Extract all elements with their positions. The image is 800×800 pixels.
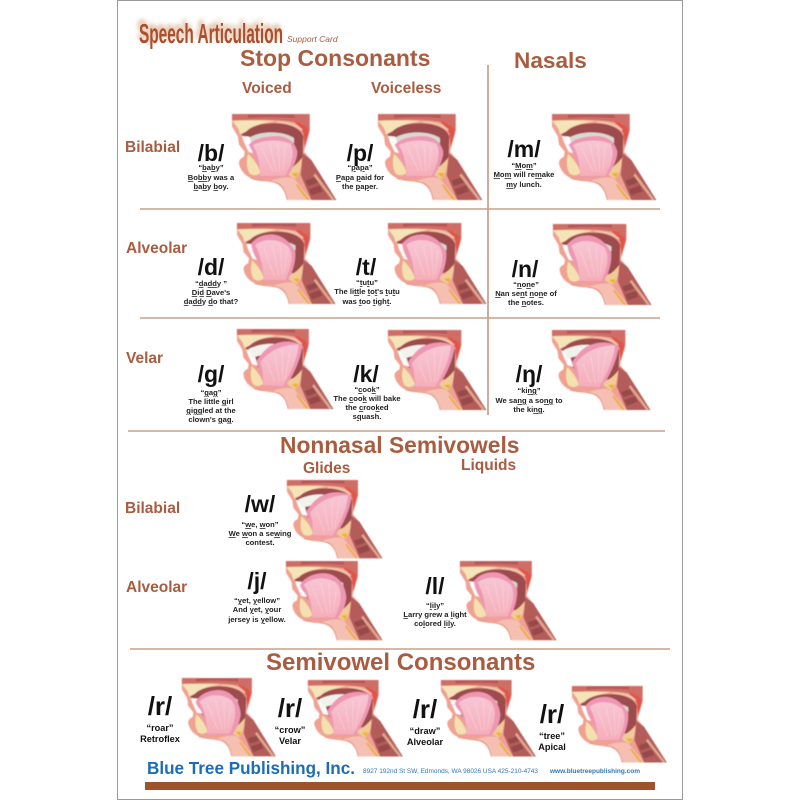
row label: alveolar glide: Alveolar — [126, 579, 187, 596]
example t: “tutu” — [356, 278, 378, 287]
icon: mouth cross-section r apical — [572, 686, 667, 763]
sound card: /l/ — [403, 561, 556, 640]
sound card: /r/ apical — [538, 686, 667, 763]
heading: glides: Glides — [303, 460, 350, 477]
sound card: /r/ alveolar — [407, 680, 536, 757]
row label: velar: Velar — [126, 350, 163, 367]
footer bar — [145, 782, 655, 790]
example b: “baby” — [198, 163, 224, 172]
phoneme l: /l/ — [425, 573, 445, 599]
icon: mouth cross-section ng — [552, 330, 650, 410]
icon: mouth cross-section b — [232, 114, 336, 200]
label velar: Velar — [279, 736, 301, 746]
sound card: /n/ — [495, 224, 651, 307]
example p: Papa paid for — [336, 173, 384, 182]
example l: colored lily. — [414, 619, 456, 628]
heading: nasals: Nasals — [514, 48, 587, 73]
icon: mouth cross-section m — [552, 114, 656, 200]
row label: bilabial: Bilabial — [125, 139, 180, 156]
phoneme r apical: /r/ — [540, 699, 564, 729]
example p: “papa” — [347, 163, 373, 172]
example k: “cook” — [354, 385, 380, 394]
icon: mouth cross-section l — [460, 561, 556, 640]
example k: The cook will bake — [333, 394, 401, 403]
example j: And yet, your — [233, 605, 281, 614]
phoneme j: /j/ — [247, 568, 267, 594]
icon: mouth cross-section g — [237, 329, 333, 409]
example p: the paper. — [342, 182, 378, 191]
example m: “Mom” — [511, 161, 537, 170]
heading: semivowel consonants: Semivowel Consonants — [266, 649, 535, 676]
heading: voiced: Voiced — [242, 80, 292, 97]
heading: nonnasal semivowels: Nonnasal Semivowels — [280, 432, 519, 458]
phoneme r velar: /r/ — [278, 693, 302, 723]
sound card: /g/ — [186, 329, 333, 424]
example t: The little tot's tutu — [334, 287, 400, 296]
phoneme n: /n/ — [512, 256, 539, 282]
sound card: /p/ — [336, 114, 482, 200]
example w: “we, won” — [241, 520, 279, 529]
publisher address: 8927 192nd St SW, Edmonds, WA 98026 USA 425-210-4743 — [363, 768, 538, 775]
heading: voiceless: Voiceless — [371, 80, 441, 97]
heading: stop consonants: Stop Consonants — [240, 45, 430, 71]
phoneme d: /d/ — [198, 254, 225, 280]
example j: “yet, yellow” — [234, 596, 280, 605]
icon: mouth cross-section n — [553, 224, 651, 305]
example g: The little girl — [188, 397, 234, 406]
label velar: “crow” — [275, 725, 305, 735]
sound card: /k/ — [333, 330, 486, 421]
heading: liquids: Liquids — [461, 457, 516, 474]
example k: squash. — [353, 412, 381, 421]
example n: Nan sent none of — [495, 289, 557, 298]
example m: Mom will remake — [494, 170, 554, 179]
example m: my lunch. — [506, 180, 542, 189]
sound card: /ŋ/ — [496, 330, 650, 414]
icon: mouth cross-section t — [388, 223, 486, 304]
phoneme w: /w/ — [245, 491, 276, 517]
example n: “none” — [513, 280, 539, 289]
icon: mouth cross-section r alveolar — [441, 680, 536, 757]
example ng: “king” — [517, 386, 541, 395]
sound card: /t/ — [334, 223, 486, 306]
sound card: /j/ — [227, 561, 382, 640]
icon: mouth cross-section r retroflex — [182, 678, 276, 756]
publisher name: Blue Tree Publishing, Inc. — [147, 758, 355, 778]
icon: mouth cross-section w — [287, 480, 382, 558]
label alveolar: “draw” — [410, 726, 440, 736]
icon: mouth cross-section k — [388, 330, 486, 410]
example g: giggled at the — [186, 406, 236, 415]
sound card: /b/ — [188, 114, 336, 200]
example j: jersey is yellow. — [228, 615, 286, 624]
icon: mouth cross-section r velar — [308, 680, 403, 757]
sound card: /w/ — [229, 480, 382, 558]
example b: Bobby was a — [188, 173, 234, 182]
publisher website: www.bluetreepublishing.com — [549, 768, 640, 775]
sound card: /m/ — [494, 114, 656, 200]
example n: the notes. — [508, 298, 544, 307]
label retroflex: “roar” — [146, 723, 174, 733]
phoneme b: /b/ — [198, 140, 225, 166]
icon: mouth cross-section d — [237, 223, 335, 304]
example l: “lily” — [426, 601, 444, 610]
page frame — [118, 0, 682, 800]
example g: clown's gag. — [188, 415, 234, 424]
phoneme ng: /ŋ/ — [516, 361, 543, 387]
example l: Larry grew a light — [403, 610, 467, 619]
example w: We won a sewing — [229, 529, 291, 538]
example b: baby boy. — [194, 182, 228, 191]
subtitle: Support Card — [287, 34, 338, 44]
icon: mouth cross-section j — [286, 561, 382, 640]
phoneme p: /p/ — [347, 140, 374, 166]
title: Speech Articulation — [139, 18, 283, 49]
example g: “gag” — [200, 388, 222, 397]
example w: contest. — [245, 538, 275, 547]
example d: daddy do that? — [184, 297, 238, 306]
sound card: /r/ retroflex — [140, 678, 276, 756]
label apical: “tree” — [539, 731, 565, 741]
example d: “daddy ” — [195, 279, 227, 288]
example k: the crooked — [345, 403, 389, 412]
sound card: /d/ — [184, 223, 335, 306]
row label: alveolar: Alveolar — [126, 240, 187, 257]
phoneme r alveolar: /r/ — [413, 694, 437, 724]
example t: was too tight. — [343, 297, 391, 306]
phoneme m: /m/ — [507, 136, 541, 162]
row label: bilabial glide: Bilabial — [125, 500, 180, 517]
example d: Did Dave's — [192, 288, 230, 297]
example ng: the king. — [513, 405, 545, 414]
example ng: We sang a song to — [496, 396, 562, 405]
label retroflex: Retroflex — [140, 734, 181, 744]
phoneme t: /t/ — [356, 254, 377, 280]
label apical: Apical — [538, 742, 566, 752]
phoneme k: /k/ — [353, 361, 379, 387]
icon: mouth cross-section p — [378, 114, 482, 200]
label alveolar: Alveolar — [407, 737, 444, 747]
phoneme r retroflex: /r/ — [148, 691, 172, 721]
phoneme g: /g/ — [198, 361, 225, 387]
sound card: /r/ velar — [275, 680, 403, 757]
